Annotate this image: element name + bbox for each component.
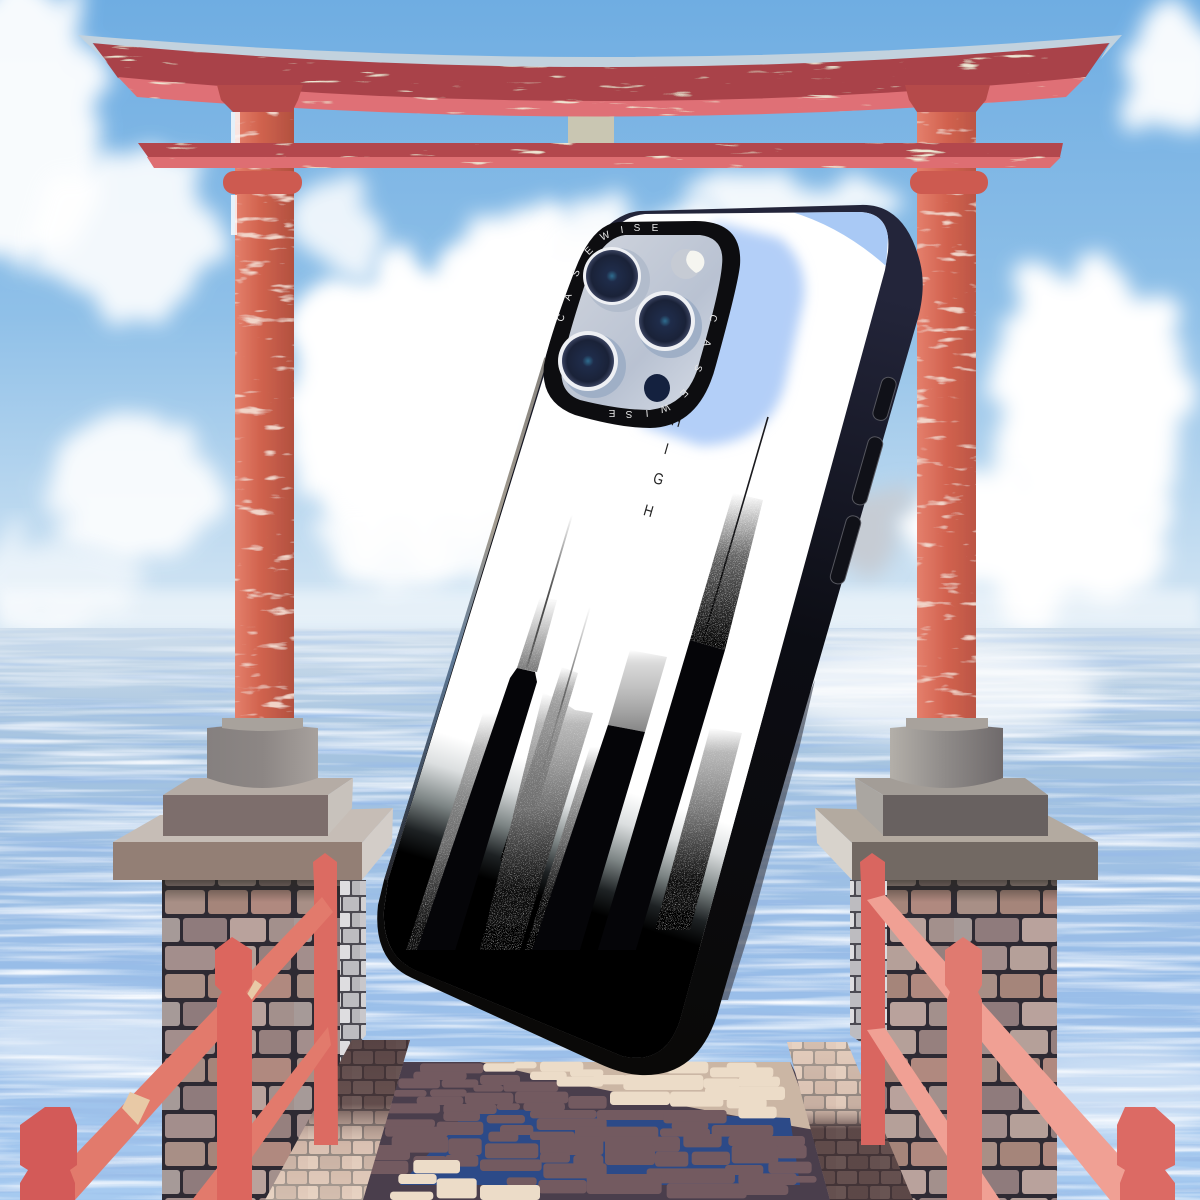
lens top bbox=[583, 247, 650, 312]
torii gate bbox=[78, 35, 1122, 718]
lidar sensor bbox=[644, 374, 670, 402]
brick column front bbox=[885, 878, 1057, 1200]
right pillar bbox=[917, 100, 976, 718]
brick column side bbox=[850, 880, 887, 1060]
CASEWISE ring text: A bbox=[562, 292, 575, 302]
shadowed stones bbox=[365, 1063, 817, 1198]
translucent lower side edge bbox=[712, 680, 815, 1000]
HIGH text: G bbox=[651, 470, 665, 490]
HIGH text: H bbox=[669, 412, 683, 432]
near post bbox=[20, 1107, 77, 1200]
top rail bbox=[867, 895, 1145, 1200]
lower rail bbox=[192, 1027, 331, 1200]
top rail bbox=[32, 897, 333, 1200]
far post bbox=[860, 853, 885, 1145]
left railing bbox=[20, 853, 338, 1200]
left curb bbox=[265, 1040, 410, 1200]
lens right bbox=[635, 291, 702, 358]
CASEWISE ring text: C bbox=[555, 313, 568, 323]
HIGH text bbox=[641, 412, 683, 522]
left stone base bbox=[113, 718, 393, 1200]
drum bbox=[207, 725, 318, 788]
CASEWISE ring text: W bbox=[658, 401, 671, 415]
pillar glow strips bbox=[231, 112, 240, 235]
floor base in shadow bbox=[320, 1062, 860, 1200]
pillar collars bbox=[223, 171, 988, 194]
blue reflection bbox=[640, 222, 804, 446]
middle post bbox=[215, 937, 252, 1200]
CASEWISE ring text bbox=[555, 223, 719, 419]
puddle water bbox=[400, 1108, 800, 1185]
printed back bbox=[384, 212, 888, 1058]
far post bbox=[313, 853, 338, 1145]
phone with case bbox=[370, 200, 923, 1080]
flash bbox=[671, 249, 704, 279]
slab side bbox=[362, 808, 393, 880]
CASEWISE ring text: S bbox=[625, 408, 632, 419]
left rim highlight bbox=[386, 358, 546, 880]
sunlit floor base bbox=[480, 1062, 815, 1130]
step top bbox=[855, 778, 1048, 795]
camera bumper bbox=[544, 221, 740, 428]
lens module bbox=[561, 235, 722, 410]
lower crossbeam bbox=[138, 143, 1063, 168]
step front bbox=[883, 795, 1048, 836]
CASEWISE ring text: E bbox=[652, 223, 659, 234]
brick column front bbox=[162, 878, 342, 1200]
CASEWISE ring text: E bbox=[583, 245, 596, 258]
CASEWISE ring text: S bbox=[634, 223, 641, 234]
slab front bbox=[852, 842, 1098, 880]
lower rail bbox=[867, 1028, 1000, 1200]
side buttons bbox=[829, 376, 898, 586]
clouds bbox=[0, 0, 1200, 628]
CASEWISE ring text: C bbox=[706, 313, 719, 323]
solid black streaks bbox=[412, 640, 725, 982]
print line right bbox=[703, 417, 768, 640]
print line centre bbox=[546, 612, 589, 758]
CASEWISE ring text: S bbox=[570, 267, 583, 279]
HIGH text: H bbox=[641, 502, 655, 522]
step top bbox=[163, 778, 353, 795]
CASEWISE ring text: I bbox=[620, 225, 624, 236]
slab side bbox=[815, 808, 852, 880]
CASEWISE ring text: W bbox=[599, 229, 612, 243]
brick shadow under slab bbox=[162, 878, 342, 902]
case body bbox=[377, 205, 923, 1075]
slab top bbox=[113, 808, 393, 843]
bumper ring bbox=[544, 221, 740, 428]
slab front bbox=[113, 842, 362, 880]
step side bbox=[328, 778, 353, 835]
drum collar bbox=[906, 718, 988, 731]
left pillar bbox=[235, 100, 294, 718]
bottom black area bbox=[392, 950, 699, 1058]
sea bbox=[0, 628, 1200, 1200]
step front bbox=[163, 795, 328, 836]
sunlit stones bbox=[390, 1062, 785, 1200]
CASEWISE ring text: I bbox=[645, 407, 649, 418]
right railing bbox=[860, 853, 1175, 1200]
HIGH text: I bbox=[662, 441, 670, 459]
brick shadow under slab bbox=[885, 878, 1057, 902]
drum bbox=[890, 725, 1003, 788]
CASEWISE ring text: S bbox=[691, 362, 704, 373]
CASEWISE ring text: E bbox=[608, 407, 615, 418]
brick column side bbox=[340, 880, 366, 1065]
right curb bbox=[787, 1042, 913, 1200]
grainy grey streaks bbox=[390, 493, 763, 1000]
print line left bbox=[527, 515, 572, 667]
CASEWISE ring text: E bbox=[677, 386, 690, 399]
step side bbox=[855, 778, 883, 835]
lens bottom bbox=[558, 331, 626, 398]
centre strut bbox=[568, 104, 614, 144]
right stone base bbox=[815, 718, 1098, 1200]
grey block above solid bbox=[608, 650, 667, 732]
CASEWISE ring text: A bbox=[700, 338, 713, 348]
middle post bbox=[945, 937, 982, 1200]
stone bridge floor bbox=[265, 1040, 913, 1200]
near post bbox=[1117, 1107, 1175, 1200]
sky background bbox=[0, 0, 1200, 630]
slab top bbox=[815, 808, 1098, 843]
rail worn patches bbox=[122, 980, 262, 1125]
top right reflection bbox=[794, 212, 888, 266]
upper roof beam bbox=[78, 35, 1122, 116]
drum collar bbox=[222, 718, 303, 731]
beam blocks on pillars bbox=[217, 85, 990, 112]
